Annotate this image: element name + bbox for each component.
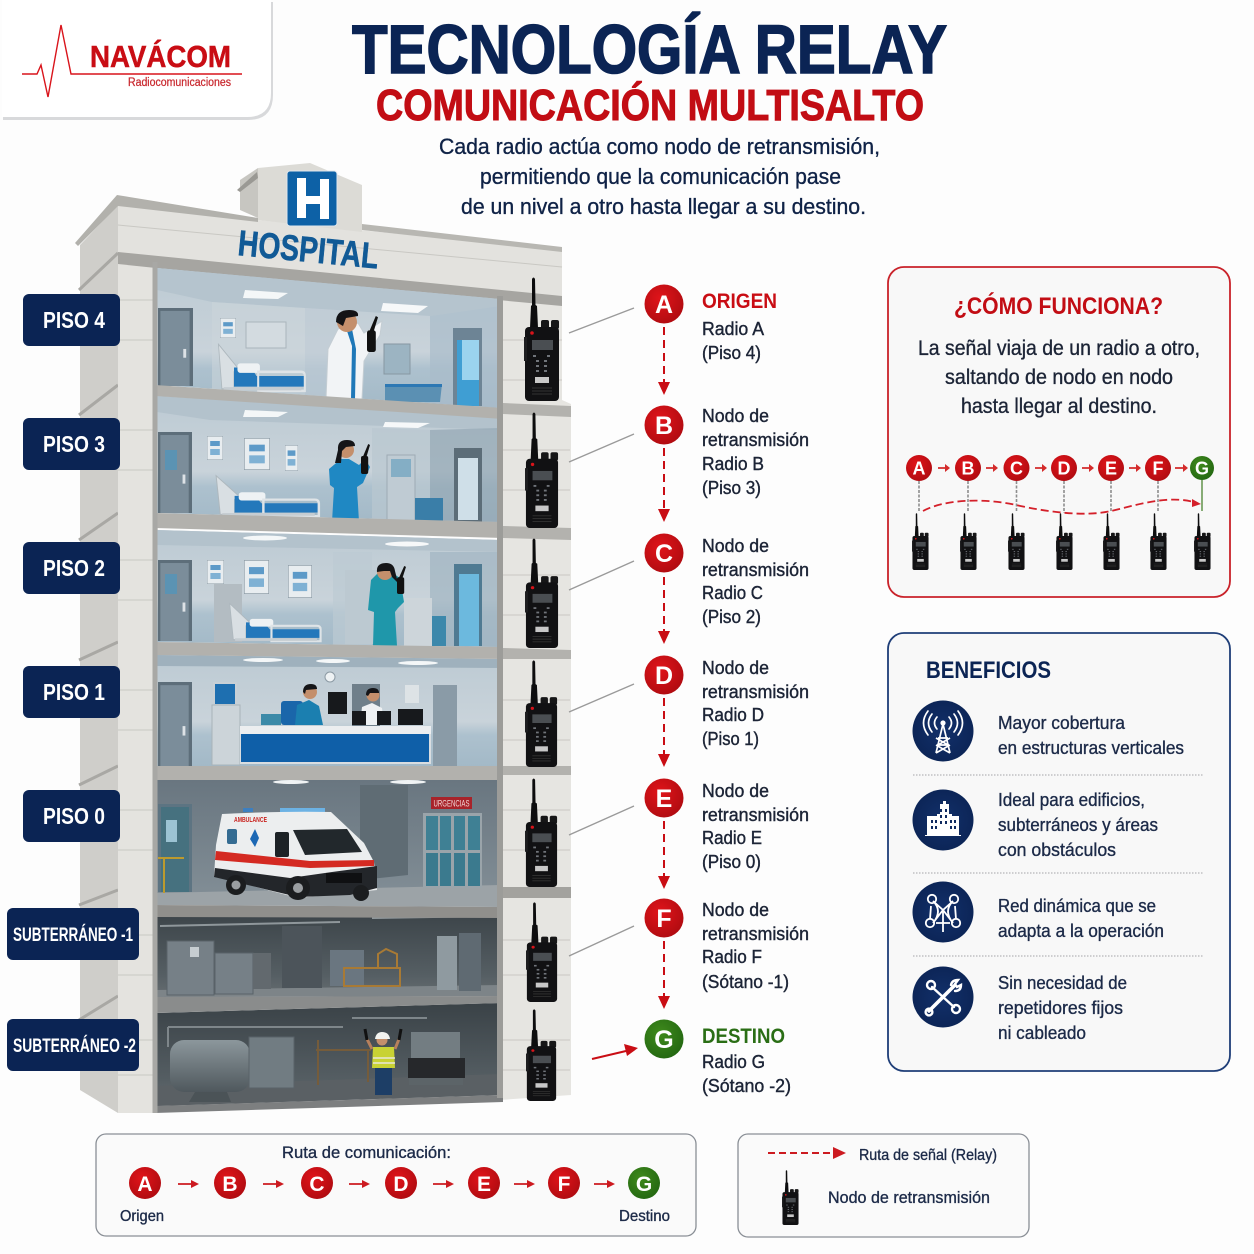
room: piso 2 [157,530,500,647]
chain nodes [906,455,1214,481]
route nodes: C [309,1173,325,1196]
label: piso 3: PISO 3 [43,431,105,457]
node D: Nodo de [702,658,769,678]
benefit text 1: Mayor cobertura [998,713,1126,733]
panel: route legend [96,1134,696,1236]
chain nodes: D [1058,458,1070,478]
node C: (Piso 2) [702,607,761,627]
urgencias sign [431,797,472,809]
route nodes: A [137,1173,153,1196]
lintel [118,252,562,306]
side wall [80,205,118,1113]
tank [170,1040,250,1102]
icon: buildings [912,790,974,850]
node G: DESTINO [702,1025,785,1048]
benefit text 3: adapta a la operación [998,921,1164,941]
node A: A [655,291,673,319]
node F: F [656,905,672,933]
node F [644,898,809,992]
node E: Nodo de [702,781,769,801]
roof tower [240,168,258,218]
destino label: Destino [619,1208,670,1225]
node C: Radio C [702,583,763,603]
room: piso 3 [157,396,500,522]
room: piso 4 [157,268,500,408]
label: subterráneo -1 [7,908,139,960]
label: piso 3 [23,418,120,470]
floor slabs [155,262,571,1113]
route nodes: B [222,1173,238,1196]
node G [644,1020,791,1096]
chain nodes: E [1105,458,1117,478]
dashed relay curve [923,499,1201,514]
route nodes: G [636,1173,652,1196]
person: receptionist 2 [360,688,384,725]
benefit text 4: ni cableado [998,1023,1086,1043]
panel text: hasta llegar al destino. [961,395,1157,418]
chain nodes: B [962,458,974,478]
node E: retransmisión [702,805,809,825]
label: piso 4: PISO 4 [43,307,105,333]
node F: (Sótano -1) [702,972,789,992]
node G: Radio G [702,1052,765,1072]
benefit text 3: Red dinámica que se [998,896,1156,916]
person: worker [365,1029,401,1095]
chain nodes: F [1152,458,1164,478]
radio A [524,278,559,401]
machine [408,1032,465,1085]
node F: Nodo de [702,900,769,920]
title: TECNOLOGÍA RELAY [352,11,947,88]
node F: Radio F [702,947,762,967]
label: subterráneo -2 [7,1019,139,1071]
H sign [287,171,337,226]
front piers [118,205,158,1113]
urgencias sign: URGENCIAS [434,798,470,808]
node D: D [655,662,673,690]
radio G [526,1009,556,1101]
node A: (Piso 4) [702,343,761,363]
node B: Radio B [702,454,764,474]
logo tagline: Radiocomunicaciones [128,77,231,89]
legend radio icon [782,1170,799,1225]
node E [644,778,809,872]
benefit text 3 [998,896,1164,941]
benefit text 4 [998,973,1127,1043]
route nodes: F [558,1173,571,1196]
node C [644,534,809,627]
subtitle: COMUNICACIÓN MULTISALTO [376,80,924,130]
intro text: de un nivel a otro hasta llegar a su destino. [461,194,866,219]
room: piso 0 [157,780,500,907]
label: piso 2: PISO 2 [43,555,105,581]
legend dashed arrow [768,1147,846,1159]
node B: (Piso 3) [702,478,761,498]
radio E [525,778,557,887]
benefit text 1: en estructuras verticales [998,738,1184,758]
node E: (Piso 0) [702,852,761,872]
route nodes [129,1167,660,1199]
radio B [525,412,558,528]
icon: tools [912,966,974,1028]
icon: network [912,882,974,942]
dotted links [919,480,1202,513]
benefit text 2 [998,790,1158,860]
intro text [439,134,880,219]
room: subterráneo -1 [157,908,500,997]
label: piso 1 [23,666,120,718]
route nodes: D [393,1173,409,1196]
legend relay text: Ruta de señal (Relay) [859,1147,997,1164]
benefit text 2: Ideal para edificios, [998,790,1145,810]
node G: G [654,1026,674,1054]
panel text: La señal viaja de un radio a otro, [918,337,1200,360]
reception desk [240,726,431,764]
node A: ORIGEN [702,290,777,313]
origen label: Origen [120,1208,164,1225]
radio C [525,538,558,648]
node B: Nodo de [702,406,769,426]
walkie-talkies on the building [524,278,559,1101]
room: subterráneo -2 [157,1003,500,1106]
legend node text: Nodo de retransmisión [828,1188,990,1207]
node C: C [655,540,673,568]
node D: retransmisión [702,682,809,702]
red arrow to destino [592,1044,638,1059]
roof cap [75,195,258,246]
monitors [261,692,423,725]
ambulance: AMBULANCE [234,815,267,824]
chain nodes: G [1195,458,1209,478]
benefit text 4: Sin necesidad de [998,973,1127,993]
panel heading: BENEFICIOS [926,657,1051,684]
panel text [918,337,1200,418]
benefit text 1 [998,713,1184,758]
label: piso 0 [23,790,120,842]
intro text: permitiendo que la comunicación pase [480,164,841,189]
benefit dividers [913,775,1203,956]
label: piso 2 [23,542,120,594]
hospital lettering: HOSPITAL [236,222,381,276]
label: subterráneo -2: SUBTERRÁNEO -2 [13,1035,136,1057]
panel: signal legend [738,1134,1029,1237]
emergency door [423,813,482,888]
benefit text 4: repetidores fijos [998,998,1123,1018]
node B [644,406,809,498]
label: subterráneo -1: SUBTERRÁNEO -1 [13,924,133,946]
panel text: saltando de nodo en nodo [945,366,1173,389]
panel heading: ¿CÓMO FUNCIONA? [954,292,1163,320]
radio D [525,660,557,767]
hospital building [75,163,571,1113]
person: doctor [326,310,382,399]
person: nurse [329,440,370,522]
room jambs [152,262,158,1113]
node B: B [655,412,673,440]
pipes and workbench [316,1040,371,1085]
generator cabinet [249,1037,294,1088]
chain arrows [938,464,1188,472]
node A: Radio A [702,319,764,339]
route heading: Ruta de comunicación: [282,1143,451,1162]
node E: Radio E [702,828,762,848]
node D: Radio D [702,705,764,725]
chain radios [912,513,1211,570]
room: piso 1 [157,655,500,766]
node B: retransmisión [702,430,809,450]
node F: retransmisión [702,924,809,944]
vertical signal path [663,327,665,998]
route arrows [178,1180,615,1188]
node E: E [656,785,672,813]
chain nodes: A [912,458,926,478]
benefit text 2: subterráneos y áreas [998,815,1158,835]
icon: antenna [912,700,974,762]
node G: (Sótano -2) [702,1076,791,1096]
chain nodes: C [1010,458,1023,478]
benefit text 2: con obstáculos [998,840,1116,860]
label: piso 1: PISO 1 [43,679,105,705]
floor labels [7,294,139,1071]
label: piso 4 [23,294,120,346]
node C: retransmisión [702,560,809,580]
ambulance [214,808,377,901]
node D [644,656,809,749]
signal arrowheads [658,382,670,1009]
logo card [2,0,273,120]
panel: beneficios [888,633,1230,1071]
intro text: Cada radio actúa como nodo de retransmisión, [439,134,880,159]
connector lines [569,308,634,956]
panel: cómo funciona [888,267,1230,597]
logo name: NAVÁCOM [90,39,231,74]
node D: (Piso 1) [702,729,759,749]
node C: Nodo de [702,536,769,556]
person: receptionist 1 [281,684,323,725]
person: nurse teal [368,563,406,646]
label: piso 0: PISO 0 [43,803,105,829]
node A [644,284,777,363]
radio F [526,902,557,1002]
logo pulse line [22,25,242,97]
route nodes: E [477,1173,491,1196]
